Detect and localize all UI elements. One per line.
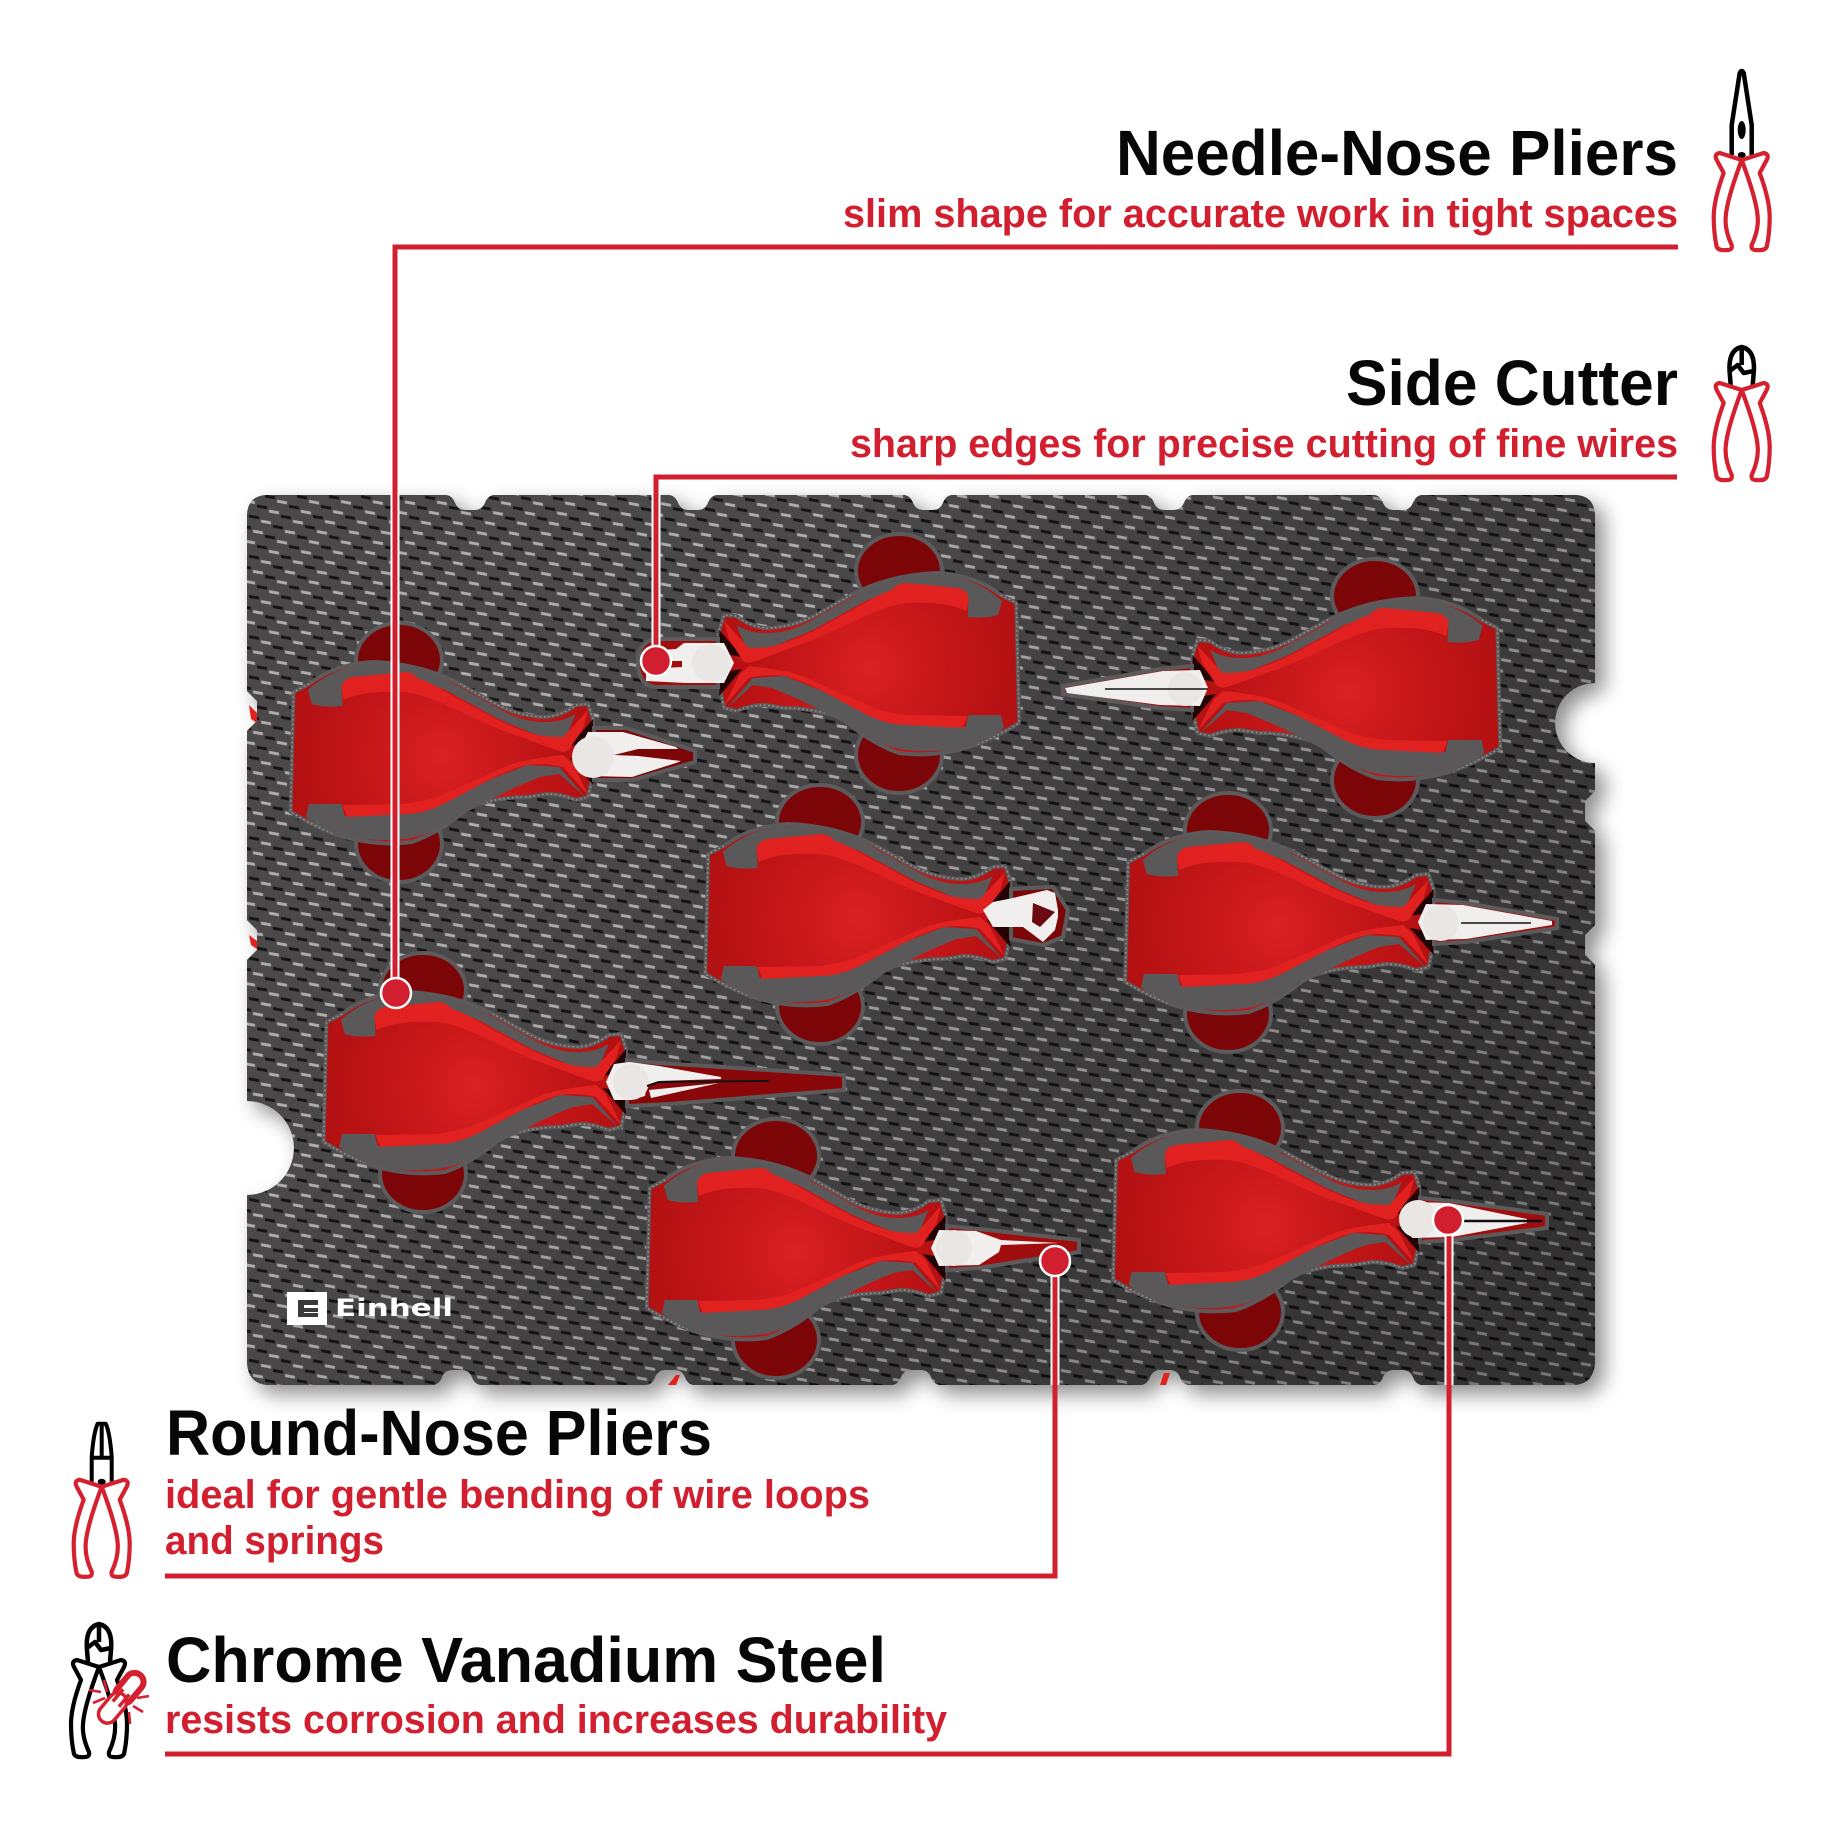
icon: chrome vanadium steel with chain link [71, 1624, 149, 1757]
text block: round-nose pliers [165, 1397, 870, 1563]
plier 7: round-nose bottom centre [647, 1119, 1079, 1378]
plier 4: end cutter middle centre [705, 785, 1068, 1044]
text block: chrome vanadium steel [165, 1624, 948, 1742]
text block: round-nose pliers: and springs [165, 1519, 384, 1563]
icon: side cutter [1714, 347, 1770, 480]
icon: round-nose pliers [74, 1424, 130, 1577]
plier 2: combination pliers top centre [638, 534, 1019, 793]
text block: round-nose pliers: Round-Nose Pliers [166, 1397, 712, 1469]
icon: needle-nose pliers [1714, 71, 1770, 250]
text block: side cutter [850, 347, 1678, 466]
Einhell logo on tray [287, 1292, 453, 1325]
foam tray [247, 495, 1595, 1385]
text block: needle-nose pliers: slim shape for accurate work in tight spaces [843, 192, 1678, 236]
callout line: needle-nose [381, 247, 1678, 1008]
text block: chrome vanadium steel: Chrome Vanadium Steel [166, 1624, 886, 1696]
plier 5: bent nose middle right [1125, 793, 1557, 1052]
callout line: chrome vanadium steel [165, 1205, 1463, 1754]
text block: side cutter: sharp edges for precise cutting of fine wires [850, 422, 1678, 466]
Einhell logo on tray: Einhell [335, 1294, 453, 1322]
callout line: side cutter [641, 477, 1677, 676]
text block: round-nose pliers: ideal for gentle bending of wire loops [165, 1473, 870, 1517]
text block: chrome vanadium steel: resists corrosion and increases durability [165, 1698, 948, 1742]
callout line: round-nose [165, 1246, 1070, 1576]
text block: needle-nose pliers: Needle-Nose Pliers [1116, 117, 1678, 189]
plier 1: flat-nose upper left [291, 623, 695, 882]
plier 6: long needle-nose lower left [324, 953, 844, 1212]
text block: needle-nose pliers [843, 117, 1678, 236]
text block: side cutter: Side Cutter [1346, 347, 1678, 419]
plier 8: needle-nose bottom right [1113, 1091, 1547, 1350]
plier 3: needle-nose top right [1063, 559, 1500, 818]
